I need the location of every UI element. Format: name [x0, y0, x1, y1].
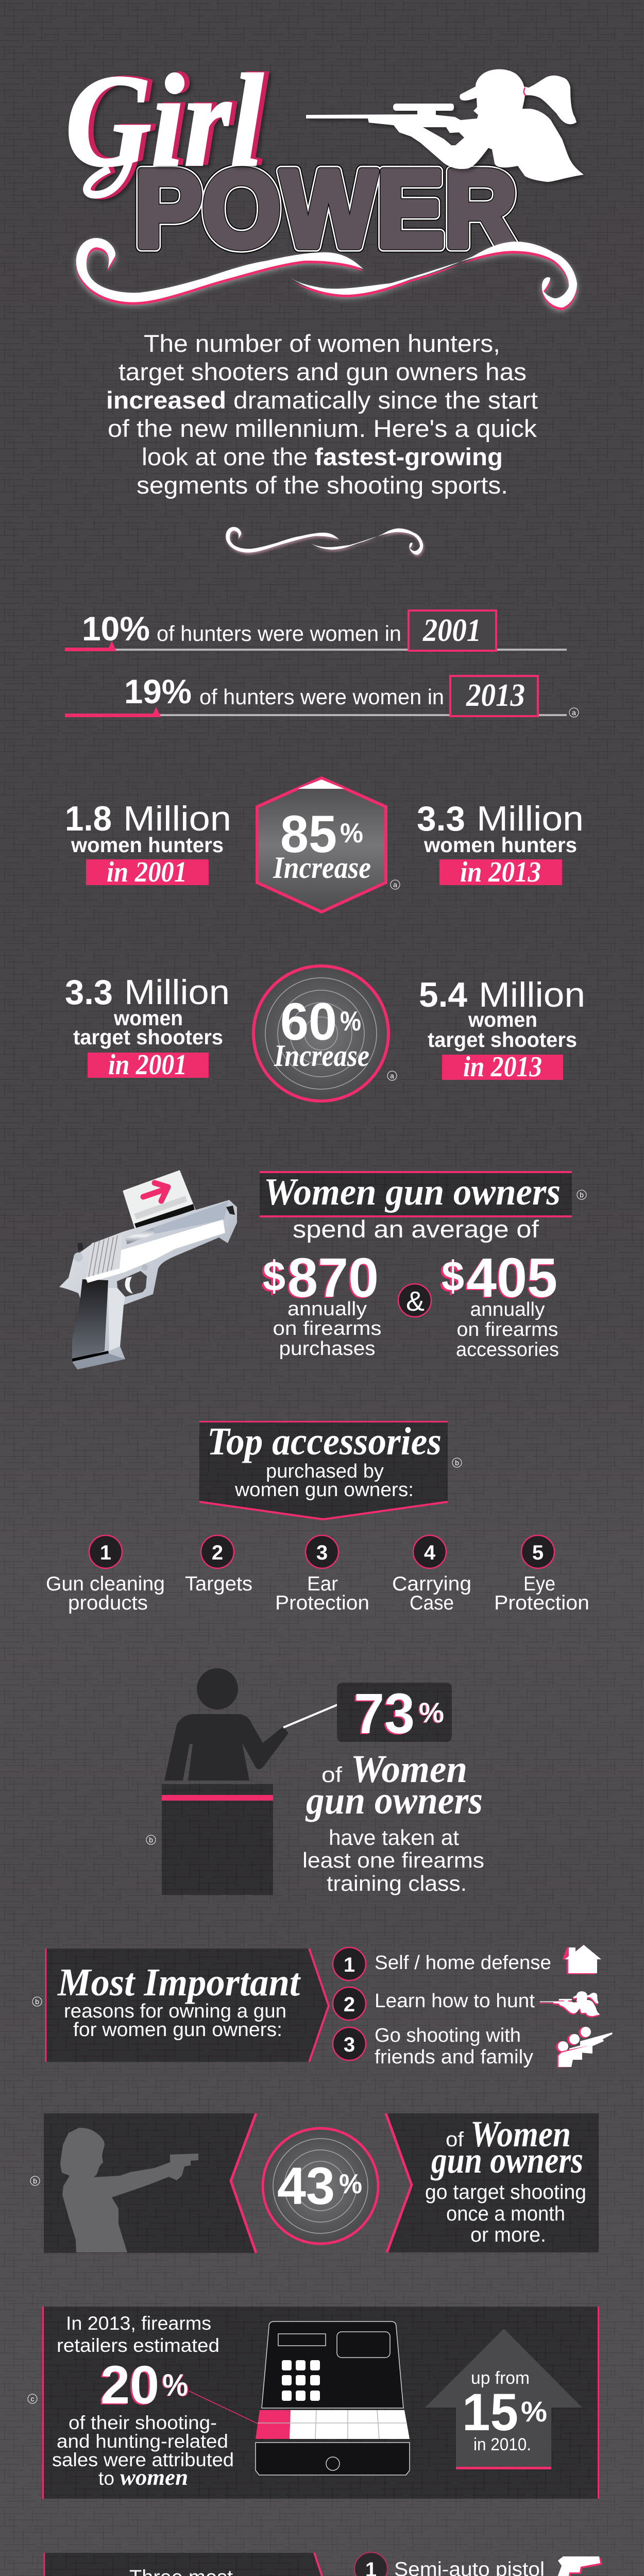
arrow: up from 15%: % — [521, 2395, 547, 2428]
icon: pistol with credit card — [59, 1171, 237, 1369]
source mark a: a — [572, 708, 576, 717]
stat: 73% training: Women — [351, 1748, 467, 1791]
target: 60% increase: 60 — [280, 992, 337, 1051]
stat: $870: $ — [261, 1255, 283, 1301]
source mark b — [146, 1835, 156, 1844]
item 3 — [275, 1535, 369, 1614]
reason 1: 1 — [344, 1954, 355, 1976]
item 5: 5 — [532, 1541, 544, 1564]
stat: 10% hunters 2001: 10% — [82, 609, 150, 648]
source mark b — [577, 1190, 586, 1199]
panel: retailers 20%: and hunting-related — [57, 2431, 228, 2452]
target: 60% increase: Increase — [274, 1039, 369, 1073]
reason 3 — [333, 2025, 533, 2068]
stat: $870 — [261, 1246, 381, 1360]
stat: women target shooters 2001: target shooters — [73, 1025, 223, 1049]
intro text: segments of the shooting sports. — [137, 471, 508, 499]
stat: 19% hunters 2013 — [65, 672, 579, 717]
ampersand badge — [398, 1284, 431, 1317]
panel: top accessories: women gun owners: — [234, 1479, 414, 1501]
item 2 — [185, 1535, 252, 1595]
stat: women hunters 2013: 3.3 — [417, 799, 465, 838]
stat: women target shooters 2001: in 2001 — [108, 1049, 187, 1081]
stat: 73% training — [302, 1682, 484, 1895]
item 3: 3 — [316, 1541, 328, 1564]
target: 43%: 43 — [277, 2157, 335, 2215]
source mark a — [391, 880, 400, 889]
stat: women target shooters 2013: target shooters — [428, 1028, 577, 1052]
reason 3: 3 — [344, 2033, 355, 2056]
target: 43% — [263, 2128, 378, 2244]
panel: retailers 20%: women — [120, 2465, 188, 2490]
heading: women gun owners: Women gun owners — [264, 1171, 561, 1213]
stat: $870: 870 — [287, 1246, 379, 1309]
panel: retailers 20%: In 2013, firearms — [66, 2313, 211, 2334]
stat: women target shooters 2001: Million — [124, 973, 230, 1012]
intro text: increased dramatically since the start — [106, 386, 538, 414]
stat: 10% hunters 2001: of hunters were women in — [157, 621, 401, 646]
right panel text: go target shooting — [425, 2181, 586, 2204]
panel: most important reasons: reasons for owning a gun — [64, 2001, 286, 2022]
reason 3: Go shooting with — [375, 2025, 521, 2046]
reason 3: friends and family — [375, 2046, 533, 2068]
panel: top accessories — [199, 1420, 462, 1519]
source mark b — [452, 1458, 462, 1467]
reason 2: Learn how to hunt — [375, 1990, 535, 2012]
item 1: Gun cleaning — [46, 1573, 165, 1595]
stat: 19% hunters 2013: of hunters were women in — [199, 685, 444, 709]
stat: $870: 870 — [286, 1247, 377, 1310]
intro text — [106, 330, 538, 499]
stat: 10% hunters 2001: 2001 — [422, 613, 481, 648]
right panel text: gun owners — [430, 2140, 583, 2181]
reason 2 — [333, 1987, 535, 2020]
item 1 — [46, 1535, 165, 1614]
stat: $870: annually — [287, 1298, 367, 1320]
intro text: of the new millennium. Here's a quick — [108, 415, 537, 442]
panel: retailers 20%: 20 — [100, 2355, 159, 2415]
stat: women target shooters 2001: 3.3 — [65, 973, 113, 1012]
target: 43%: % — [339, 2169, 362, 2199]
panel: top accessories: Top accessories — [207, 1420, 442, 1463]
small swash divider — [226, 527, 424, 556]
source mark a — [569, 708, 579, 717]
target: 60% increase — [253, 966, 397, 1101]
stat: $405 — [439, 1246, 559, 1361]
title word: Girl: Girl — [65, 48, 263, 194]
panel: retailers 20% — [28, 2307, 599, 2499]
item 3: Ear — [307, 1573, 338, 1595]
stat: $870: purchases — [279, 1338, 375, 1360]
panel: most important reasons — [32, 1948, 329, 2062]
stat: women hunters 2013: women hunters — [423, 833, 577, 857]
stat: 73% training: have taken at — [329, 1825, 459, 1850]
source mark a: a — [393, 880, 397, 889]
stat: $405: 405 — [465, 1247, 556, 1310]
credit card — [124, 1171, 195, 1229]
intro text: The number of women hunters, — [144, 330, 500, 357]
hexagon: 85% increase: 85 — [280, 805, 337, 863]
reason 2: 2 — [344, 1993, 355, 2016]
swash under title — [76, 238, 577, 311]
item 1: 1 — [100, 1541, 111, 1564]
list: top accessories — [46, 1535, 589, 1614]
intro text: target shooters and gun owners has — [118, 358, 527, 385]
stat: women target shooters 2001: women — [113, 1006, 183, 1030]
source mark a — [387, 1071, 397, 1080]
title word: POWER: POWER — [134, 147, 517, 269]
stat: women hunters 2001: in 2001 — [107, 856, 187, 888]
item 1: products — [68, 1592, 148, 1614]
hexagon: 85% increase: % — [340, 818, 363, 849]
stat: 73% training: training class. — [327, 1871, 467, 1895]
icon: cash register — [189, 2321, 410, 2475]
item 4: 4 — [424, 1541, 436, 1564]
panel: retailers 20%: retailers estimated — [57, 2335, 219, 2356]
stat: women target shooters 2013: 5.4 — [419, 975, 467, 1014]
arrow: up from 15%: in 2010. — [473, 2435, 531, 2454]
source mark b — [32, 1997, 42, 2006]
stat: women hunters 2013: in 2013 — [460, 856, 541, 888]
panel: retailers 20%: % — [161, 2368, 189, 2403]
list: reasons — [333, 1945, 613, 2068]
hexagon: 85% increase: Increase — [273, 851, 371, 885]
icon: house — [563, 1945, 601, 1974]
source mark b: b — [33, 2177, 37, 2185]
stat: women hunters 2013: Million — [477, 799, 584, 838]
reason 1: Self / home defense — [375, 1952, 551, 1974]
ampersand badge: & — [406, 1286, 425, 1317]
item 4 — [392, 1535, 471, 1614]
target: 60% increase: % — [340, 1006, 361, 1037]
icon: small hunter — [539, 1991, 600, 2018]
stat: women target shooters 2013 — [419, 975, 585, 1083]
arrow: up from 15%: 15 — [462, 2383, 518, 2442]
item 2: 2 — [212, 1541, 223, 1564]
stat: $405: on firearms — [456, 1319, 558, 1341]
title: Girl Power — [65, 47, 584, 311]
item 3: Protection — [275, 1592, 369, 1614]
panel: three most popular firearms — [28, 2553, 334, 2576]
right panel text: once a month — [446, 2202, 565, 2225]
icon: semi-auto pistol — [555, 2556, 602, 2576]
stat: women target shooters 2001 — [65, 973, 230, 1081]
source mark b — [30, 2176, 40, 2185]
icon: pink hair tie — [524, 88, 526, 95]
panel: retailers 20%: of their shooting- — [69, 2412, 217, 2433]
stat: women hunters 2001: women hunters — [71, 833, 224, 857]
hexagon: 85% increase — [257, 778, 400, 912]
title word: POWER: POWER — [134, 147, 517, 269]
panel: most important reasons: for women gun owners: — [73, 2019, 282, 2041]
stat: women target shooters 2013: Million — [479, 975, 585, 1014]
right panel text: Women — [470, 2113, 571, 2155]
arrow: up from 15% — [425, 2329, 582, 2469]
icon: group shooting — [556, 2027, 613, 2067]
panel: retailers 20%: to — [98, 2468, 114, 2489]
panel: retailers 20%: sales were attributed — [52, 2449, 234, 2470]
list: popular firearms — [354, 2552, 602, 2576]
stat: $405: $ — [442, 1253, 464, 1300]
source mark a: a — [390, 1072, 394, 1080]
title word: Girl: Girl — [71, 47, 268, 193]
right panel text: of — [446, 2128, 464, 2151]
panel: 43% target shooting — [30, 2113, 599, 2253]
stat: women target shooters 2013: in 2013 — [463, 1051, 542, 1083]
panel: retailers 20%: 20 — [99, 2356, 158, 2416]
stat: $405: accessories — [456, 1339, 559, 1361]
item 4: Carrying — [392, 1573, 471, 1595]
stat: 73% training: 73 — [354, 1682, 415, 1745]
stat: 73% training: 73 — [352, 1683, 413, 1747]
item 5: Protection — [494, 1592, 589, 1614]
stat: 19% hunters 2013: 2013 — [466, 678, 525, 713]
item 5 — [494, 1535, 589, 1614]
source mark b: b — [455, 1459, 459, 1467]
silhouette: woman aiming rifle — [306, 69, 584, 182]
right panel text: or more. — [470, 2224, 546, 2246]
icon: instructor at podium — [146, 1668, 345, 1895]
stat: 10% hunters 2001 — [65, 609, 567, 651]
stat: 73% training: least one firearms — [302, 1848, 484, 1872]
stat: women hunters 2001: 1.8 — [65, 799, 112, 838]
item 5: Eye — [523, 1573, 555, 1595]
stat: $405: annually — [470, 1299, 545, 1320]
title word: POWER: POWER — [134, 147, 517, 269]
source mark b: b — [149, 1836, 153, 1844]
stat: 73% training: of — [321, 1762, 342, 1787]
text: spend an average of: spend an average of — [293, 1215, 539, 1243]
source mark b: b — [35, 1997, 39, 2006]
item 2: Targets — [185, 1573, 252, 1595]
stat: 73% training: gun owners — [305, 1779, 483, 1822]
firearm 1 — [354, 2552, 545, 2576]
right panel text — [386, 2113, 599, 2252]
stat: $870: on firearms — [273, 1318, 381, 1340]
stat: $405: 405 — [466, 1246, 557, 1309]
arrow: up from 15%: up from — [471, 2368, 530, 2388]
stat: 19% hunters 2013: 19% — [124, 672, 192, 710]
source mark c: c — [31, 2395, 34, 2403]
stat: $405: $ — [439, 1255, 462, 1301]
stat: women hunters 2013 — [417, 799, 584, 888]
panel: top accessories: purchased by — [266, 1461, 384, 1482]
source mark b: b — [580, 1191, 584, 1199]
item 4: Case — [410, 1592, 454, 1614]
stat: $870: $ — [263, 1253, 285, 1300]
stat: women hunters 2001: Million — [123, 799, 231, 838]
stat: women target shooters 2013: women — [468, 1008, 537, 1031]
reason 1 — [333, 1947, 551, 1980]
left panel with woman silhouette — [30, 2113, 256, 2253]
title word: POWER: POWER — [134, 147, 517, 269]
source mark c — [28, 2394, 37, 2403]
stat: 73% training: % — [419, 1697, 444, 1728]
intro text: look at one the fastest-growing — [142, 443, 503, 470]
panel: retailers 20%: % — [162, 2368, 188, 2402]
stat: women hunters 2001 — [65, 799, 231, 888]
panel: most important reasons: Most Important — [57, 1961, 301, 2004]
stat: 73% training: % — [418, 1697, 443, 1729]
